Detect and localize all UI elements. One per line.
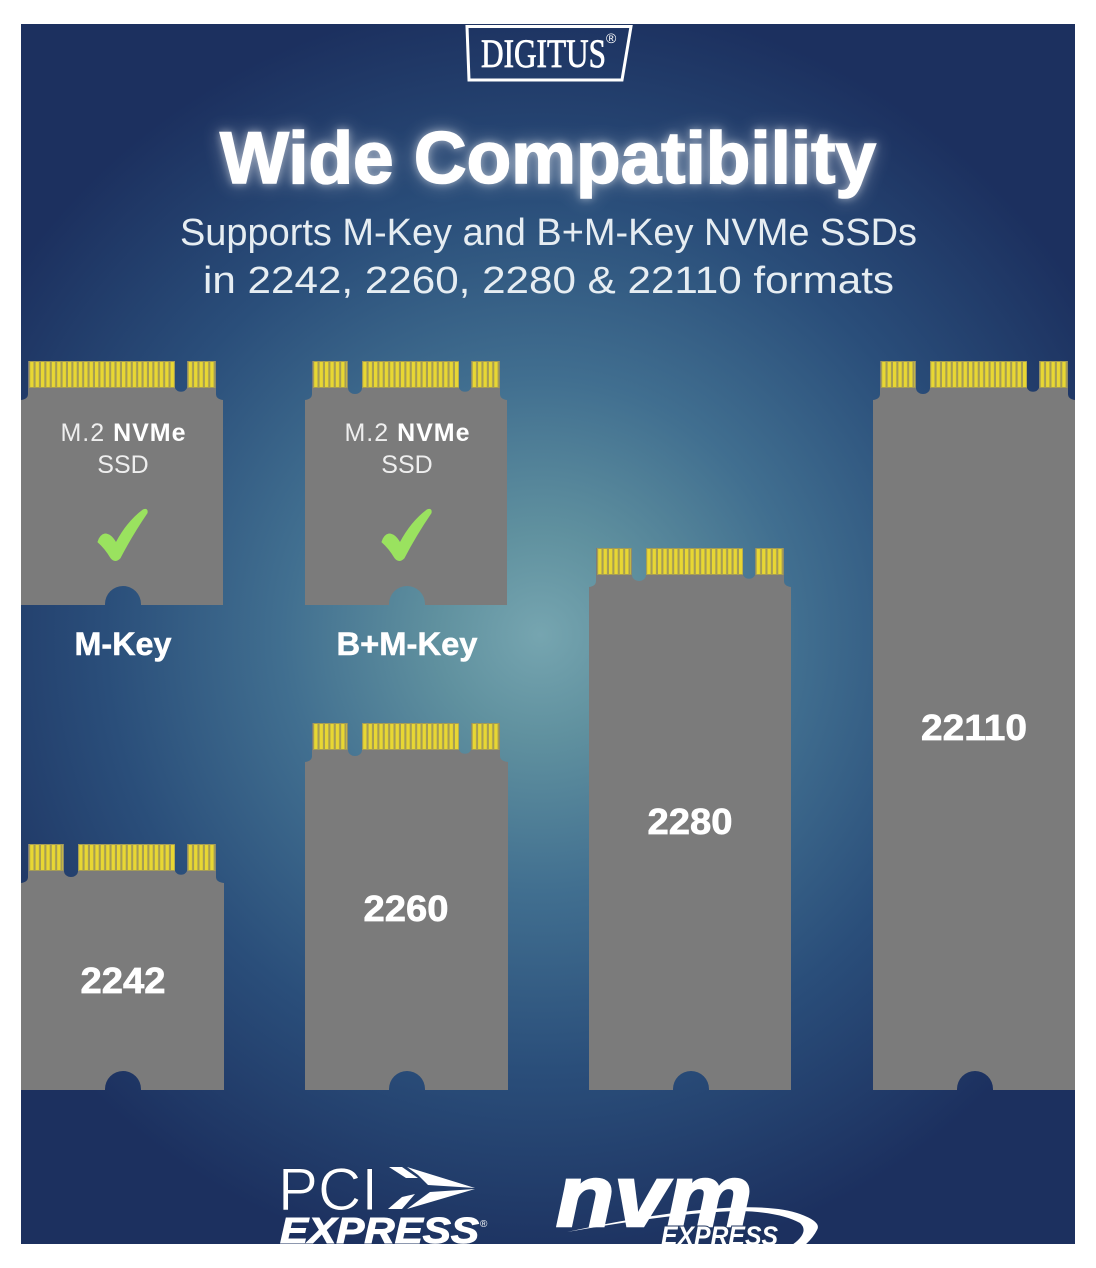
heading: B+M-Key: B+M-Key [336,626,478,662]
label: 22110: 22110 [921,707,1027,748]
heading: M-Key: M-Key [74,626,172,662]
panel: 2280 SSD [589,548,791,1090]
panel: 22110 SSD [873,361,1075,1090]
label: 2260: 2260 [364,888,448,929]
icon: green check [98,509,147,560]
label: M.2 NVMe SSD: M.2 NVMe [344,419,470,447]
label: 2280: 2280 [648,801,732,842]
label: 2242: 2242 [80,960,166,1001]
logo: DIGITUS: ® [606,30,617,46]
label: M.2 NVMe SSD [346,423,469,473]
logo: NVM Express: nvm [556,1148,752,1245]
panel: 2242 SSD [21,844,224,1090]
label: M.2 NVMe SSD: M.2 NVMe [60,419,186,447]
panel: M-Key SSD [21,361,223,605]
logo: PCI Express: ® [480,1219,488,1230]
label: M.2 NVMe SSD [62,423,185,473]
logo: PCI Express: EXPRESS [280,1210,479,1251]
title: Wide Compatibility [220,118,876,199]
subtitle: Supports M-Key and B+M-Key NVMe SSDs [180,212,917,254]
subtitle [182,218,916,298]
logo: PCI Express: PCI [278,1156,378,1223]
panel: 2260 SSD [305,723,508,1090]
logo: PCI Express [280,1167,488,1244]
subtitle: in 2242, 2260, 2280 & 22110 formats [203,260,894,302]
label: M.2 NVMe SSD: SSD [381,451,433,479]
logo: NVM Express: EXPRESS [661,1221,778,1251]
panel: B+M-Key SSD [305,361,507,605]
label: M.2 NVMe SSD: SSD [97,451,149,479]
logo: NVM Express [556,1178,818,1244]
logo: DIGITUS: DIGITUS [481,31,606,76]
icon: green check [382,509,431,560]
